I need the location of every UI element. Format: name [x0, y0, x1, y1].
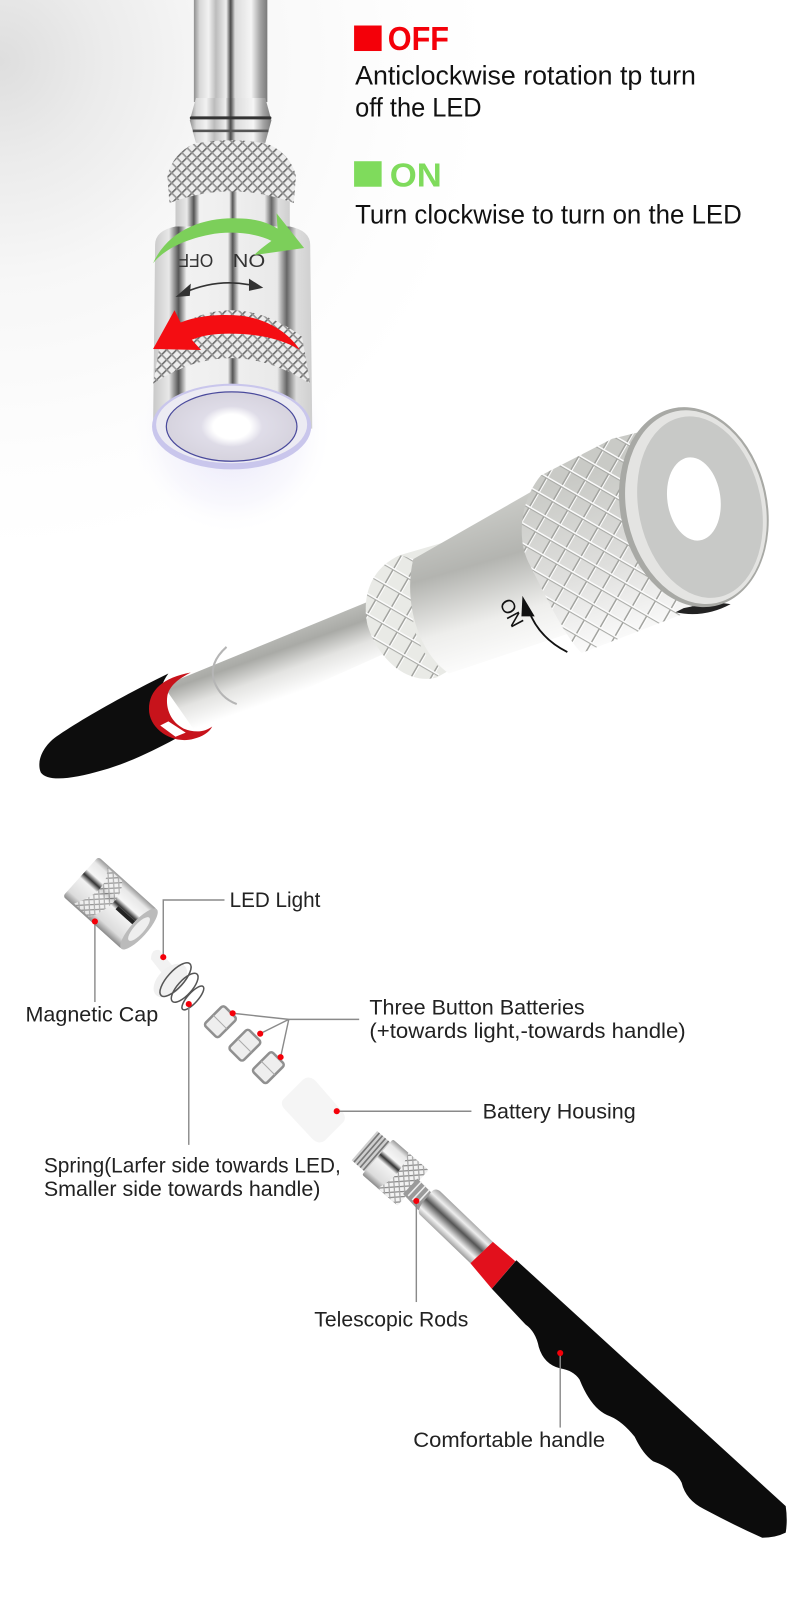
OFF legend: [354, 21, 696, 122]
part labels: Battery Housing: [483, 1099, 636, 1123]
render: tool in perspective, magnetic face: [39, 393, 787, 778]
ON legend: [354, 158, 742, 229]
ON marking: ON: [495, 595, 528, 631]
red collar: [470, 1242, 515, 1289]
ON legend: Turn clockwise to turn on the LED: [355, 199, 742, 229]
part labels: Magnetic Cap: [26, 1002, 158, 1026]
front face: [152, 384, 311, 469]
telescopic rod top: [194, 0, 267, 102]
magnet face: [601, 393, 787, 621]
red ring: [149, 672, 212, 740]
cap markings: [176, 250, 265, 297]
red arrow: [153, 310, 300, 350]
OFF legend: off the LED: [355, 92, 482, 122]
cap markings: ON: [233, 250, 265, 271]
battery housing: [282, 1078, 345, 1142]
LED and spring part: [147, 950, 207, 1013]
OFF legend: OFF: [388, 21, 449, 58]
part labels: Telescopic Rods: [314, 1308, 468, 1332]
cap markings: OFF: [179, 250, 213, 271]
magnetic cap part: [63, 857, 163, 954]
exploded view parts: [63, 857, 787, 1538]
lower knurled ring: [153, 310, 310, 384]
part labels: Smaller side towards handle): [44, 1177, 320, 1201]
ON legend: ON: [390, 158, 442, 195]
part labels: LED Light: [230, 888, 320, 912]
part labels: [26, 888, 686, 1452]
main body: [153, 184, 312, 429]
button batteries: [204, 1005, 285, 1084]
handle tip: [39, 673, 176, 778]
part labels: Three Button Batteries: [369, 995, 585, 1019]
part labels: Comfortable handle: [413, 1428, 605, 1452]
rod collar: [213, 647, 237, 704]
neck rings: [190, 98, 271, 143]
top knurled ring: [167, 140, 296, 203]
front knurled ring: [366, 541, 480, 679]
ON marking: [495, 595, 567, 652]
green arrow: [153, 213, 304, 263]
OFF legend: Anticlockwise rotation tp turn: [355, 61, 696, 91]
threaded head: [349, 1128, 428, 1205]
photo: LED tool close-up with rotation arrows: [152, 0, 312, 469]
telescopic rod: [403, 1179, 493, 1263]
body: [410, 478, 633, 673]
callout dots: [92, 918, 563, 1356]
rear knurled ring: [522, 429, 714, 653]
rod: [163, 602, 386, 737]
callout lines: [95, 900, 560, 1428]
part labels: (+towards light,-towards handle): [369, 1019, 686, 1043]
black foam handle: [492, 1260, 787, 1538]
part labels: Spring(Larfer side towards LED,: [44, 1153, 341, 1177]
